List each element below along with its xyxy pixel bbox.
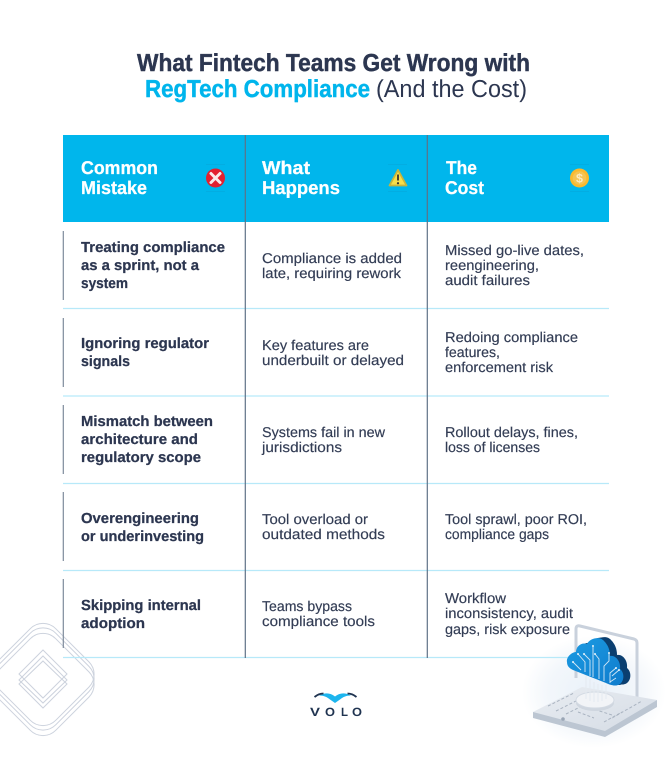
row 1: system: [81, 276, 128, 292]
decorative diamonds: [0, 616, 102, 743]
row 5: Teams bypass: [262, 599, 352, 615]
row 4: Overengineering: [81, 511, 199, 527]
row 4: outdated methods: [262, 527, 385, 543]
row 2: features,: [445, 345, 500, 361]
row 2: Key features are: [262, 338, 369, 354]
row 4: or underinvesting: [81, 529, 204, 545]
icon: coin: [570, 164, 589, 192]
row 2: Redoing compliance: [445, 330, 578, 346]
row 4: [81, 511, 587, 545]
row 3: Rollout delays, fines,: [445, 425, 578, 441]
title: [137, 50, 530, 103]
row 4: compliance gaps: [445, 527, 549, 543]
row 1: Compliance is added: [262, 251, 402, 267]
logo: volo: L: [341, 705, 348, 719]
row 5: compliance tools: [262, 614, 375, 630]
row left markers: [62, 231, 64, 648]
row 2: signals: [81, 354, 130, 370]
row 3: Mismatch between: [81, 414, 213, 430]
logo: volo: [310, 693, 362, 719]
row 1: Treating compliance: [81, 240, 225, 256]
row 1: late, requiring rework: [262, 266, 402, 282]
row 5: [81, 591, 573, 638]
header: the cost: The: [446, 157, 477, 178]
logo: volo: O: [325, 705, 335, 719]
illustration glow: [522, 636, 666, 748]
row 4: Tool sprawl, poor ROI,: [445, 512, 587, 528]
row 4: Tool overload or: [262, 512, 368, 528]
row 2: [81, 330, 578, 376]
row 5: Skipping internal: [81, 598, 201, 614]
icon: warning triangle: [388, 164, 407, 192]
column dividers: [245, 135, 427, 658]
row 1: as a sprint, not a: [81, 258, 200, 274]
row 3: Systems fail in new: [262, 425, 386, 441]
row separators: [63, 308, 609, 658]
header: common mistake: Common: [81, 157, 158, 178]
header: what happens: [262, 157, 340, 198]
icon: red cross: [206, 164, 225, 192]
logo: volo: O: [352, 705, 362, 719]
title: RegTech Compliance: [145, 76, 370, 103]
row 5: Workflow: [445, 591, 507, 607]
row 3: architecture and: [81, 432, 198, 448]
header: what happens: Happens: [262, 177, 340, 198]
title: What Fintech Teams Get Wrong with: [137, 50, 530, 77]
logo: volo: V: [310, 705, 320, 719]
header: what happens: What: [262, 157, 310, 178]
title: (And the Cost): [376, 76, 527, 103]
table header band: [63, 135, 609, 222]
row 3: [81, 414, 578, 466]
row 1: reengineering,: [445, 258, 539, 274]
row 1: audit failures: [445, 273, 530, 289]
row 5: inconsistency, audit: [445, 606, 573, 622]
illustration: cloud on circuit platform: [533, 626, 657, 737]
icon: coin: $: [576, 172, 583, 186]
header: common mistake: Mistake: [81, 177, 147, 198]
row 3: loss of licenses: [445, 440, 540, 456]
row 3: jurisdictions: [261, 440, 342, 456]
row 2: underbuilt or delayed: [262, 353, 404, 369]
row 3: regulatory scope: [81, 450, 201, 466]
row 1: [81, 240, 584, 292]
header: the cost: Cost: [445, 177, 484, 198]
row 2: Ignoring regulator: [81, 336, 209, 352]
row 5: adoption: [81, 616, 145, 632]
header: common mistake: [81, 157, 158, 198]
row 2: enforcement risk: [445, 360, 554, 376]
header: the cost: [445, 157, 484, 198]
row 5: gaps, risk exposure: [445, 622, 570, 638]
row 1: Missed go-live dates,: [445, 243, 584, 259]
